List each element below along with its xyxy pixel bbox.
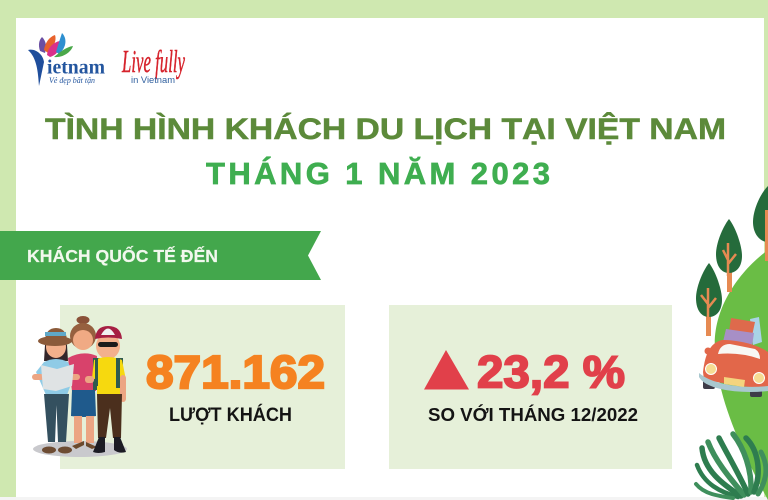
- panel: change: [389, 305, 672, 469]
- illustration: hill with car and trees: [696, 186, 768, 500]
- label: visitors: LƯỢT KHÁCH: [169, 404, 292, 426]
- icon: car with luggage: [699, 317, 768, 397]
- subtitle: THÁNG 1 NĂM 2023: [206, 156, 550, 191]
- left woman with map: [32, 328, 80, 454]
- icon: three tourists: [32, 316, 127, 457]
- panel: visitors: [32, 305, 345, 469]
- ribbon: section heading: KHÁCH QUỐC TẾ ĐẾN: [27, 245, 218, 266]
- label: change: SO VỚI THÁNG 12/2022: [428, 404, 638, 425]
- tree: left: [696, 263, 722, 336]
- title: TÌNH HÌNH KHÁCH DU LỊCH TẠI VIỆT NAM: [45, 112, 726, 146]
- tree: right: [753, 186, 768, 261]
- icon: palm leaves: [696, 434, 766, 498]
- logo: Vietnam tourism: Vẻ đẹp bất tận: [49, 76, 95, 85]
- logo: Live fully in Vietnam: [121, 43, 185, 86]
- hill: [715, 250, 768, 500]
- right man with cap: [85, 326, 126, 453]
- logo: Vietnam tourism: ietnam: [47, 56, 105, 78]
- logo: Vietnam tourism: [28, 33, 105, 86]
- tree: middle: [716, 219, 742, 292]
- ribbon: section heading: [0, 231, 321, 280]
- logo: Live fully in Vietnam: Live fully: [121, 43, 185, 79]
- value: change: 23,2 %: [477, 346, 625, 398]
- value: visitors: 871.162: [146, 346, 325, 398]
- icon: up triangle: [424, 350, 469, 390]
- logo: Live fully in Vietnam: in Vietnam: [131, 75, 175, 86]
- middle woman: [68, 316, 97, 449]
